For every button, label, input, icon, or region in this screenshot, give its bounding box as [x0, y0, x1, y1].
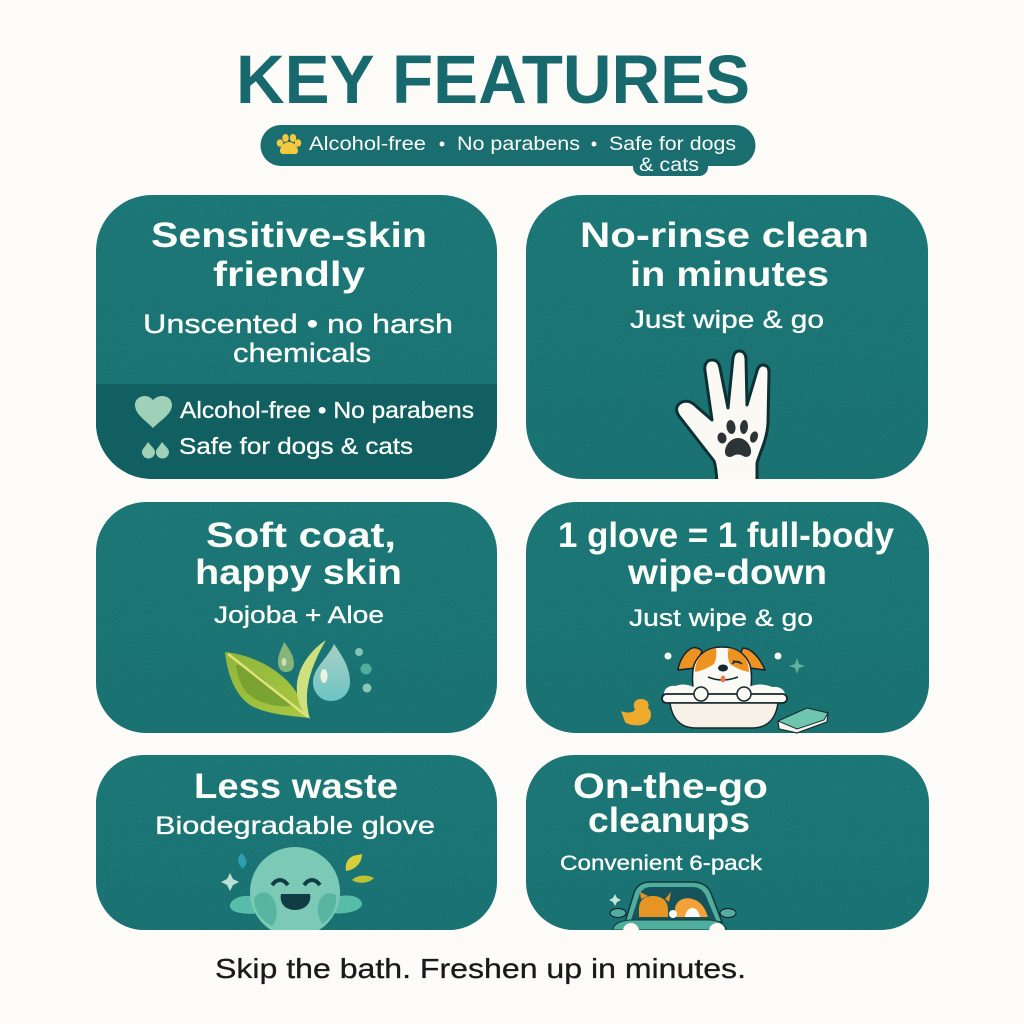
heading: On-the-go [573, 767, 768, 806]
badge: product claims: No parabens [457, 133, 580, 155]
panel: less waste [96, 755, 497, 937]
tub body [670, 703, 778, 728]
heading: Less waste [194, 767, 398, 806]
icon: paired drops [142, 442, 169, 459]
dog head [692, 647, 752, 696]
rubber duck [621, 699, 651, 725]
panel: on-the-go cleanups [526, 755, 929, 939]
badge: product claims [260, 125, 755, 176]
icon: dog in bathtub [621, 647, 828, 733]
icon: yellow paw [277, 134, 301, 154]
icon: glove with paw print [677, 351, 769, 482]
heading: No-rinse clean [580, 216, 869, 255]
panel: on-the-go cleanups: cleanups [588, 801, 750, 840]
subtext: Biodegradable glove [155, 812, 435, 840]
icon: smiling earth [221, 847, 374, 937]
book [778, 708, 828, 733]
panel: sensitive-skin friendly: friendly [213, 255, 366, 294]
panel: sensitive-skin friendly: chemicals [233, 338, 371, 368]
dog ears [678, 648, 702, 670]
panel: one glove full-body wipe-down [526, 502, 929, 733]
text: safe for dogs and cats: Safe for dogs & cats [179, 433, 413, 459]
subtext: Unscented • no harsh [143, 309, 453, 339]
panel: soft coat, happy skin: happy skin [195, 553, 402, 592]
panel: no-rinse clean: in minutes [630, 255, 829, 294]
panel: no-rinse clean [526, 195, 928, 482]
heading: Soft coat, [206, 516, 396, 555]
title: KEY FEATURES [236, 41, 750, 118]
subtext: Just wipe & go [629, 605, 813, 632]
tub rim [662, 694, 787, 703]
panel: sensitive-skin friendly [96, 195, 497, 479]
heading: 1 glove = 1 full-body [558, 516, 895, 555]
tagline: Skip the bath. Freshen up in minutes. [215, 953, 746, 984]
paw print [716, 419, 759, 457]
icon: heart [135, 396, 172, 428]
badge: product claims: & cats [639, 154, 699, 176]
heading: Sensitive-skin [151, 216, 427, 255]
text: alcohol-free no parabens: Alcohol-free • No parabens [180, 397, 474, 423]
icon: leaf and water drops [225, 640, 372, 719]
subtext: Convenient 6-pack [560, 852, 763, 875]
badge: product claims: Safe for dogs [609, 133, 736, 155]
badge text: Alcohol-free [309, 133, 426, 155]
foam [664, 684, 785, 695]
subtext: Jojoba + Aloe [214, 602, 384, 629]
panel: one glove full-body wipe-down: wipe-down [627, 553, 827, 592]
subtext: Just wipe & go [630, 306, 824, 334]
panel: soft coat, happy skin [96, 502, 497, 733]
icon: dogs in car [609, 881, 736, 930]
